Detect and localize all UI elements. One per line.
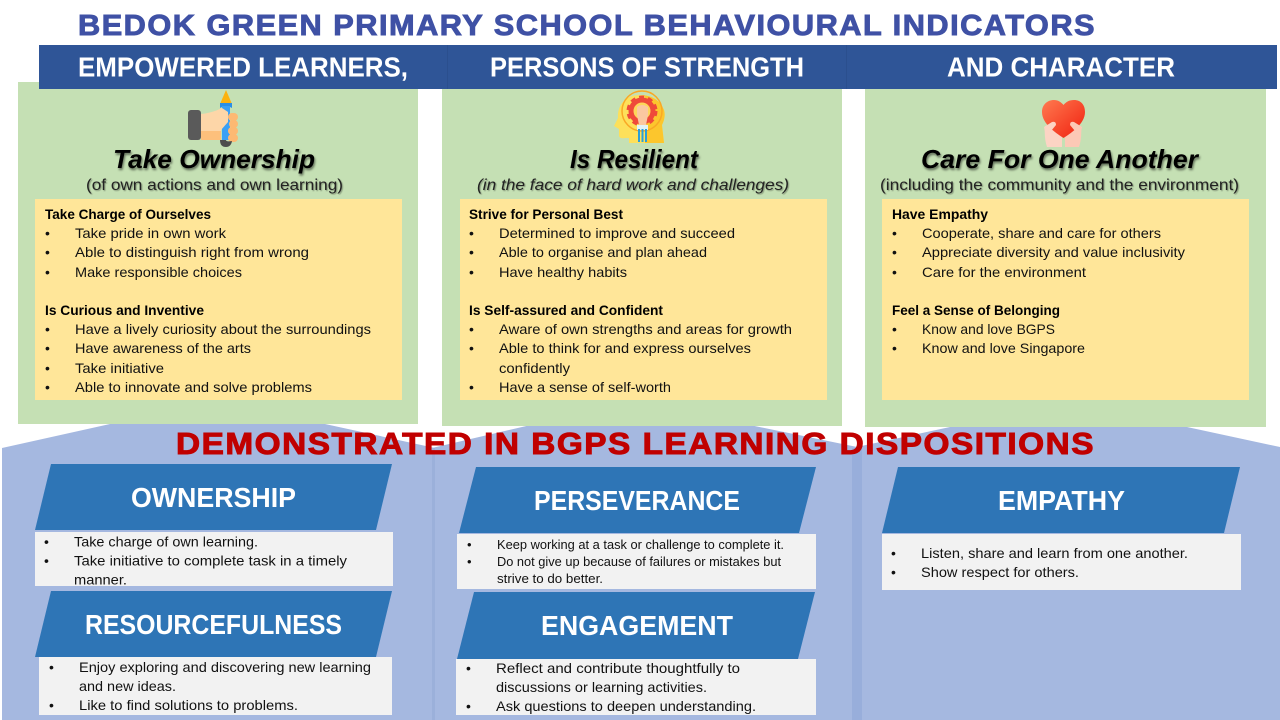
panel: is resilient xyxy=(442,82,842,426)
text block: care for one another indicators: Care for the environment xyxy=(922,264,1086,280)
text block: is resilient indicators: Determined to improve and succeed xyxy=(499,225,735,241)
text block: is resilient indicators: • xyxy=(469,340,474,356)
subtitle: take ownership: (of own actions and own learning) xyxy=(86,177,343,194)
text block: is resilient indicators: • xyxy=(469,264,474,280)
text block: is resilient indicators: Have healthy habits xyxy=(499,264,627,280)
text block: care for one another indicators: • xyxy=(892,340,897,356)
text block: take ownership indicators: Able to innovate and solve problems xyxy=(75,379,312,395)
disposition: engagement: Reflect and contribute thoughtfully to xyxy=(496,660,740,676)
disposition: engagement: discussions or learning activities. xyxy=(496,679,707,695)
text block: take ownership indicators: Have a lively curiosity about the surroundings xyxy=(75,321,371,337)
section heading: learning dispositions: DEMONSTRATED IN BGPS LEARNING DISPOSITIONS xyxy=(176,426,1095,461)
disposition: empathy: • xyxy=(891,545,896,561)
subtitle: is resilient: (in the face of hard work and challenges) xyxy=(477,177,789,194)
text block: take ownership indicators: Make responsible choices xyxy=(75,264,242,280)
disposition: resourcefulness xyxy=(35,591,392,715)
text block: is resilient indicators xyxy=(460,199,827,400)
text block: care for one another indicators: Know and love Singapore xyxy=(922,340,1085,356)
text block: care for one another indicators: • xyxy=(892,225,897,241)
subtitle: care for one another: (including the community and the environment) xyxy=(880,177,1239,194)
text block: is resilient indicators: confidently xyxy=(499,360,570,376)
disposition: empathy: Listen, share and learn from one another. xyxy=(921,545,1188,561)
text block: take ownership indicators: Take pride in own work xyxy=(75,225,227,241)
disposition: resourcefulness: Like to find solutions to problems. xyxy=(79,697,298,713)
disposition: resourcefulness: and new ideas. xyxy=(79,678,176,694)
disposition: empathy: • xyxy=(891,564,896,580)
text block: care for one another indicators: Cooperate, share and care for others xyxy=(922,225,1161,241)
text block: take ownership indicators: • xyxy=(45,340,50,356)
text block: take ownership indicators: • xyxy=(45,264,50,280)
panel: take ownership xyxy=(18,82,418,424)
text block: is resilient indicators: Able to think for and express ourselves xyxy=(499,340,751,356)
disposition: ownership: • xyxy=(44,552,49,568)
text block: take ownership indicators: Is Curious and Inventive xyxy=(45,302,204,318)
disposition: engagement: Ask questions to deepen understanding. xyxy=(496,698,756,714)
text block: take ownership indicators: Take initiative xyxy=(75,360,164,376)
text block: take ownership indicators: • xyxy=(45,360,50,376)
text block: is resilient indicators: Able to organise and plan ahead xyxy=(499,244,707,260)
disposition: resourcefulness: Enjoy exploring and discovering new learning xyxy=(79,659,371,675)
icon: hands holding heart xyxy=(1042,100,1085,147)
icon: hand holding pencil xyxy=(188,90,238,147)
text block: take ownership indicators xyxy=(35,199,402,400)
heading: is resilient: Is Resilient xyxy=(570,144,699,174)
disposition: resourcefulness: • xyxy=(49,659,54,675)
text block: is resilient indicators: Have a sense of self-worth xyxy=(499,379,671,395)
text block: care for one another indicators: Feel a Sense of Belonging xyxy=(892,302,1060,318)
disposition: resourcefulness: RESOURCEFULNESS xyxy=(85,609,342,640)
disposition: ownership xyxy=(35,464,393,588)
text block: take ownership indicators: • xyxy=(45,225,50,241)
text block: is resilient indicators: • xyxy=(469,379,474,395)
disposition: ownership: • xyxy=(44,534,49,550)
text block: is resilient indicators: • xyxy=(469,244,474,260)
disposition: engagement: • xyxy=(466,698,471,714)
text block: take ownership indicators: Have awareness of the arts xyxy=(75,340,251,356)
disposition: ownership: OWNERSHIP xyxy=(131,482,296,513)
disposition: perseverance xyxy=(457,467,816,589)
panel: care for one another xyxy=(865,82,1266,427)
text block: is resilient indicators: Is Self-assured and Confident xyxy=(469,302,663,318)
heading: take ownership: Take Ownership xyxy=(113,144,315,174)
icon: resilient head with raised fist xyxy=(614,91,665,143)
text block: is resilient indicators: • xyxy=(469,321,474,337)
disposition: empathy xyxy=(882,467,1241,590)
text block: care for one another indicators xyxy=(882,199,1249,400)
banner: values: EMPOWERED LEARNERS, xyxy=(78,52,408,82)
lower section background pentagons xyxy=(2,424,1280,720)
disposition: perseverance: Do not give up because of failures or mistakes but xyxy=(497,554,781,569)
heading: care for one another: Care For One Another xyxy=(921,144,1200,174)
disposition: perseverance: Keep working at a task or challenge to complete it. xyxy=(497,537,784,552)
text block: take ownership indicators: • xyxy=(45,244,50,260)
disposition: perseverance: strive to do better. xyxy=(497,571,603,586)
text block: care for one another indicators: Know and love BGPS xyxy=(922,321,1055,337)
disposition: ownership: manner. xyxy=(74,572,127,588)
main title: BEDOK GREEN PRIMARY SCHOOL BEHAVIOURAL INDICATORS xyxy=(78,10,1096,42)
disposition: resourcefulness: • xyxy=(49,697,54,713)
text block: take ownership indicators: • xyxy=(45,321,50,337)
disposition: engagement: ENGAGEMENT xyxy=(541,610,733,641)
text block: is resilient indicators: Strive for Personal Best xyxy=(469,206,623,222)
disposition: perseverance: • xyxy=(467,554,472,569)
disposition: engagement: • xyxy=(466,660,471,676)
text block: care for one another indicators: Appreciate diversity and value inclusivity xyxy=(922,244,1185,260)
text block: take ownership indicators: Take Charge of Ourselves xyxy=(45,206,211,222)
disposition: empathy: Show respect for others. xyxy=(921,564,1079,580)
disposition: empathy: EMPATHY xyxy=(998,485,1125,516)
disposition: ownership: Take charge of own learning. xyxy=(74,534,258,550)
banner: values: AND CHARACTER xyxy=(947,52,1175,82)
disposition: ownership: Take initiative to complete task in a timely xyxy=(74,552,347,568)
text block: is resilient indicators: Aware of own strengths and areas for growth xyxy=(499,321,792,337)
text block: care for one another indicators: Have Empathy xyxy=(892,206,988,222)
disposition: perseverance: PERSEVERANCE xyxy=(534,485,740,516)
banner: values: PERSONS OF STRENGTH xyxy=(490,52,804,82)
text block: take ownership indicators: • xyxy=(45,379,50,395)
disposition: perseverance: • xyxy=(467,537,472,552)
disposition: engagement xyxy=(456,592,816,715)
text block: care for one another indicators: • xyxy=(892,244,897,260)
text block: care for one another indicators: • xyxy=(892,321,897,337)
text block: is resilient indicators: • xyxy=(469,225,474,241)
banner: values xyxy=(39,45,1277,89)
text block: take ownership indicators: Able to distinguish right from wrong xyxy=(75,244,309,260)
text block: care for one another indicators: • xyxy=(892,264,897,280)
